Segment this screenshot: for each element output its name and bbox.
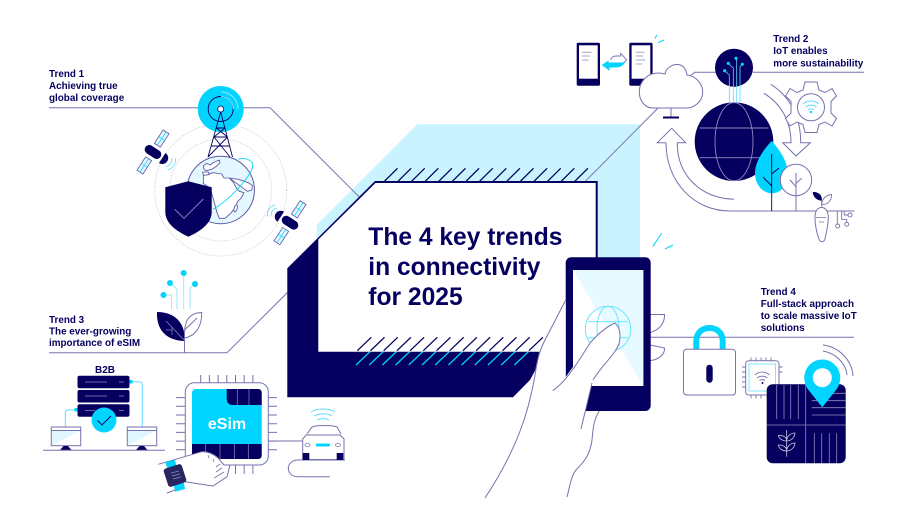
central title panel — [287, 168, 598, 397]
fingers behind phone — [650, 314, 665, 360]
Trend 4 label: solutions — [761, 323, 805, 334]
Trend 3 label — [49, 315, 227, 353]
globe on screen — [585, 306, 631, 352]
Trend 1 label: Trend 1 — [49, 69, 85, 80]
shield — [165, 181, 212, 237]
Trend 4 label: Full-stack approach — [761, 299, 854, 310]
eSim chip — [176, 375, 277, 474]
Trend 4 label: to scale massive IoT — [761, 311, 857, 322]
Trend 2 label: IoT enables — [773, 46, 828, 57]
carrot with roots — [813, 192, 852, 242]
Trend 3 label: Trend 3 — [49, 315, 85, 326]
hand with smartwatch — [158, 452, 230, 493]
radio tower — [198, 86, 244, 157]
satellite right — [256, 189, 311, 248]
Trend 1 label: global coverage — [49, 93, 125, 104]
B2B heading: B2B — [95, 365, 115, 376]
Trend 3 label: The ever-growing — [49, 326, 131, 338]
connected car — [268, 409, 345, 477]
title: for 2025 — [368, 284, 463, 311]
cloud — [639, 64, 703, 118]
hand holding phone — [485, 300, 620, 498]
recycling arrows — [657, 84, 854, 211]
IoT circle — [715, 49, 753, 87]
chip label: eSim — [208, 416, 246, 433]
hatching — [357, 168, 588, 351]
title: in connectivity — [368, 254, 541, 281]
monitors — [43, 427, 165, 450]
connectors — [65, 382, 142, 427]
orbit — [213, 159, 253, 209]
Trend 3 label: importance of eSIM — [49, 338, 140, 349]
Trend 1 label: Achieving true — [49, 81, 118, 92]
earth globe — [187, 156, 254, 224]
water drop and trees — [755, 141, 812, 211]
Trend 2 label — [691, 34, 864, 75]
sustainability globe — [695, 49, 773, 181]
icon: wifi chip — [742, 358, 782, 398]
server — [78, 376, 130, 417]
Trend 4 label: Trend 4 — [761, 287, 796, 298]
B2B diagram — [43, 365, 165, 450]
Trend 4 label — [761, 287, 857, 334]
check badge — [92, 408, 116, 432]
gear with wifi — [786, 82, 836, 132]
title: The 4 key trends — [368, 224, 562, 251]
phones exchanging data — [577, 35, 664, 86]
Trend 1 label — [49, 69, 270, 108]
icon: padlock — [684, 328, 736, 395]
illustration: global coverage — [132, 86, 311, 256]
coverage rings — [155, 124, 287, 256]
icon: plant with circuit — [157, 270, 202, 352]
satellite left — [132, 127, 187, 186]
icon: smart field with location pin — [767, 345, 853, 463]
sparks above phone — [653, 233, 673, 249]
Trend 2 label: more sustainability — [773, 58, 864, 70]
phone — [566, 257, 651, 411]
light cyan backdrop panel — [317, 124, 640, 262]
watch — [165, 460, 177, 470]
Trend 2 label: Trend 2 — [773, 34, 809, 45]
